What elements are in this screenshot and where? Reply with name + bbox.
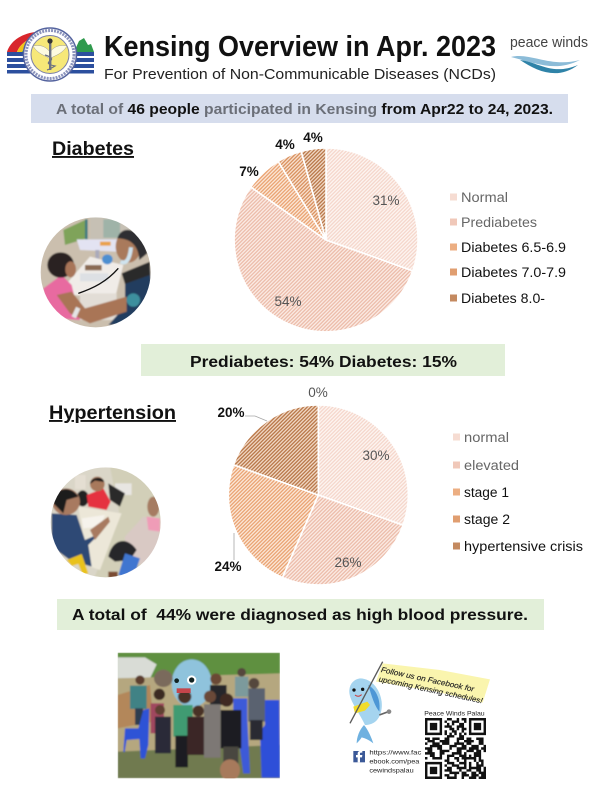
- facebook url: cewindspalau: [369, 768, 414, 775]
- hypertension legend: stage 1: [464, 485, 509, 500]
- QR code: [425, 718, 486, 779]
- logo: ministry of health seal: [7, 28, 94, 81]
- title: Kensing Overview in Apr. 2023: [104, 31, 496, 63]
- hypertension pie value labels and leaders: 30%: [362, 448, 390, 463]
- banner flag: [376, 663, 490, 706]
- hypertension pie value labels and leaders: 20%: [217, 405, 245, 420]
- diabetes legend: Diabetes 8.0-: [461, 291, 545, 306]
- diabetes pie value labels: 54%: [274, 294, 302, 309]
- photo: group of children with mascot: [118, 653, 280, 781]
- hypertension pie value labels and leaders: 24%: [214, 559, 242, 574]
- diabetes pie value labels: [239, 130, 400, 309]
- facebook url: https://www.fac: [369, 750, 422, 757]
- photo: doctor checking a patient with stethoscope: [40, 217, 153, 330]
- heading: Diabetes: Diabetes: [52, 139, 134, 160]
- diabetes legend: [450, 190, 566, 306]
- chart: hypertension pie: [228, 405, 408, 585]
- diabetes legend: Prediabetes: [461, 215, 537, 230]
- chart: diabetes pie: [234, 148, 418, 332]
- hypertension legend: hypertensive crisis: [464, 539, 583, 554]
- callout: high blood pressure total: A total of 44% were diagnosed as high blood pressure.: [72, 607, 528, 624]
- diabetes legend: Normal: [461, 190, 508, 205]
- diabetes pie value labels: 7%: [239, 164, 259, 179]
- qr caption: Peace Winds Palau: [424, 710, 485, 717]
- hypertension legend: [453, 430, 583, 554]
- facebook url: ebook.com/pea: [369, 759, 420, 766]
- banner flag: upcoming Kensing schedules!: [378, 674, 484, 706]
- subtitle: For Prevention of Non-Communicable Diseases (NCDs): [104, 67, 496, 83]
- hypertension pie value labels and leaders: [214, 385, 390, 574]
- hypertension legend: elevated: [464, 458, 519, 473]
- diabetes legend: Diabetes 6.5-6.9: [461, 240, 566, 255]
- mascot with follow-us banner: [349, 662, 490, 775]
- hypertension legend: stage 2: [464, 512, 510, 527]
- facebook url: [369, 750, 422, 775]
- fish character: [349, 678, 391, 743]
- participants banner: A total of 46 people participated in Kensing from Apr22 to 24, 2023.: [56, 102, 553, 118]
- photo: nurse consulting patients at a table: [50, 467, 163, 580]
- facebook icon: [353, 751, 365, 762]
- participants banner: [31, 94, 568, 123]
- banner flag: Follow us on Facebook for: [380, 665, 475, 694]
- hypertension legend: normal: [464, 430, 509, 445]
- logo: peace winds: peace winds: [510, 34, 588, 51]
- callout: prediabetes and diabetes totals: Prediabetes: 54% Diabetes: 15%: [190, 354, 457, 371]
- diabetes pie value labels: 4%: [275, 137, 295, 152]
- logo: peace winds: [510, 34, 588, 73]
- callout: prediabetes and diabetes totals: [141, 344, 505, 376]
- flag pole: [350, 662, 383, 723]
- heading: Hypertension: Hypertension: [49, 403, 176, 424]
- diabetes pie value labels: 4%: [303, 130, 323, 145]
- callout: high blood pressure total: [57, 599, 544, 630]
- diabetes legend: Diabetes 7.0-7.9: [461, 265, 566, 280]
- hypertension pie value labels and leaders: 26%: [334, 555, 362, 570]
- hypertension pie value labels and leaders: 0%: [308, 385, 328, 400]
- diabetes pie value labels: 31%: [372, 193, 400, 208]
